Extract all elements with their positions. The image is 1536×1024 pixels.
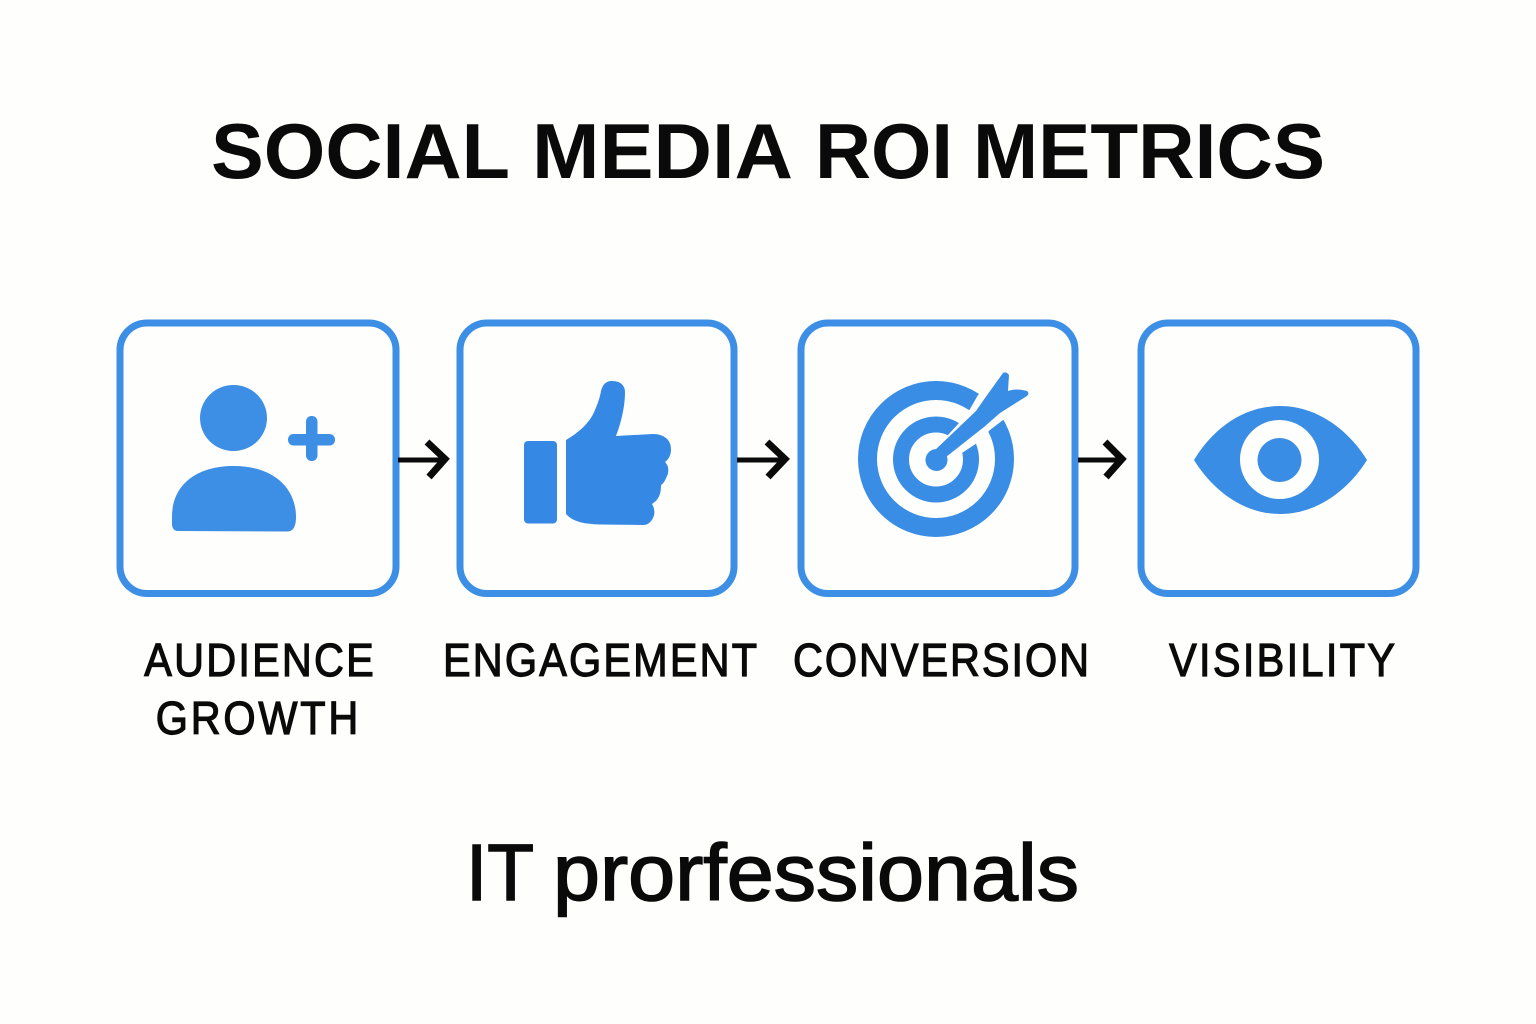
title: ROI [815,107,953,195]
panel: engagement [460,323,734,594]
arrow 2 [737,442,785,477]
label: engagement: ENGAGEMENT [443,635,757,687]
icon: eye [1194,406,1367,514]
panel: conversion [801,323,1075,594]
panel: audience growth [120,323,396,594]
title [211,107,1325,195]
arrow 3 [1078,442,1122,477]
label: audience growth: AUDIENCE [144,635,374,687]
label: audience growth [144,635,374,745]
title: METRICS [973,107,1325,195]
icon: target with arrow [868,372,1028,528]
label: audience growth: GROWTH [156,693,358,745]
label: conversion: CONVERSION [793,635,1089,687]
panel: visibility [1141,323,1416,594]
title: MEDIA [532,107,793,195]
arrow 1 [398,442,445,477]
icon: thumbs up [524,381,671,525]
subtitle: IT [466,828,534,917]
title: SOCIAL [211,107,510,195]
subtitle: prorfessionals [553,828,1079,917]
icon: person with plus [172,385,335,532]
label: visibility: VISIBILITY [1169,635,1395,687]
